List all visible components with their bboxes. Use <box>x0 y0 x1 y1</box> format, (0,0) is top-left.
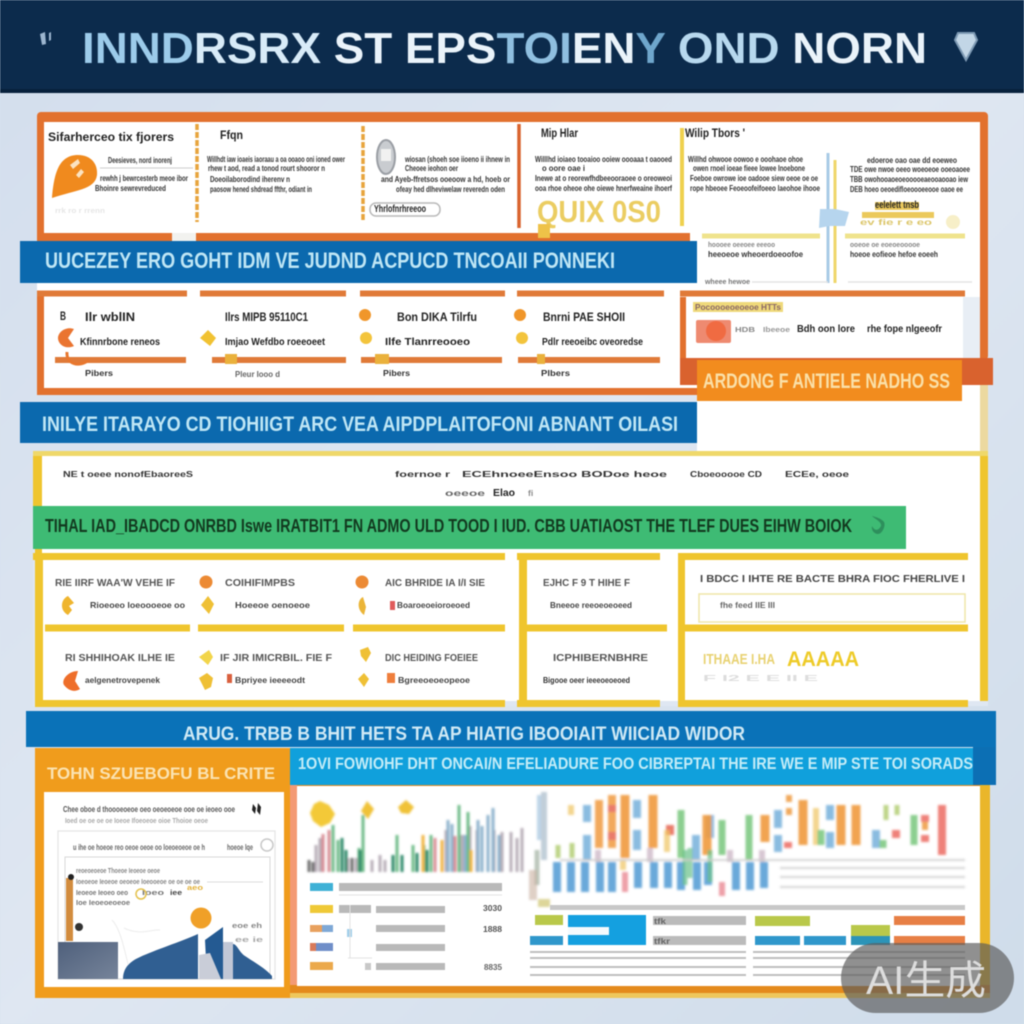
card: column five: TBB owohooaoeoeooooeaeooaooao iew <box>850 174 968 184</box>
feature: wide box top <box>699 574 965 622</box>
icon: shield <box>955 33 977 60</box>
feature: row two right: DIC HEIDING FOEIEE <box>385 653 478 664</box>
feature: second column top <box>543 578 632 610</box>
card three: Pibers <box>383 368 410 378</box>
banner: green band: TIHAL IAD_IBADCD ONRBD Iswe IRATBIT1 FN ADMO ULD TOOD I IUD. CBB UATIAOST THE TLEF DUES EIHW BOIOK <box>45 516 852 536</box>
card: column five: hoooee oeeoee eeeoo <box>708 240 775 249</box>
card: intro: Bhoinre sewrevreduced <box>95 183 166 193</box>
panel: orange illustration card: u ihe oe hoeoe reo oeoe oeoe oo Ioeoeoeoe oe h <box>73 842 205 852</box>
card one: Kfinnrbone reneos <box>80 337 160 348</box>
card two <box>200 312 346 379</box>
banner: blue section one <box>20 241 697 283</box>
pill button: Yhrlofnrhreeoo <box>374 204 426 215</box>
feature: second column bottom: ICPHIBERNBHRE <box>553 653 648 664</box>
title: INNDRSRX ST EPSTOIENY OND NORN <box>82 24 927 73</box>
card: column five: wheee hewoe <box>704 277 750 286</box>
intro text: oeeoe <box>445 488 485 498</box>
illustration: tower <box>66 874 83 941</box>
body text: iee <box>170 888 182 897</box>
banner: blue section one: UUCEZEY ERO GOHT IDM VE JUDND ACPUCD TNCOAII PONNEKI <box>45 248 615 273</box>
panel: orange illustration card: hoeoe Iqe <box>227 842 253 852</box>
feature: second column top: Bneeoe reeoeoeoeed <box>550 600 632 610</box>
panel: white gap area <box>697 385 980 453</box>
card: column three: wiosan (shoeh soe iioeno ii ihnew in <box>404 154 510 164</box>
icon: sun two <box>361 801 374 819</box>
card: column two: Willhdt iaw ioaeis iaoraau a oa ooaoo oni ioned ower <box>207 154 345 164</box>
banner: cyan chart heading <box>290 747 996 785</box>
feature: wide box bottom figures <box>703 648 859 683</box>
body text: Ioeoeoe Ieoeoe oeoeoe Ioeooeoe oe oe oe oe <box>76 877 200 886</box>
feature: wide box bottom figures: F I2 E E II E <box>703 673 819 683</box>
feature: row one middle: Hoeeoe oenoeoe <box>235 600 310 610</box>
body text: aeo <box>187 883 204 892</box>
table: left rows: 8835 <box>484 962 502 972</box>
feature: wide box top: I BDCC I IHTE RE BACTE BHRA FIOC FHERLIVE I <box>700 574 965 585</box>
table: coloured blocks <box>530 905 965 975</box>
card: column three: and Ayeb-ffretsos ooeoow a hd, hoeb or <box>381 174 511 184</box>
illustration: gray block <box>58 942 118 979</box>
feature: wide box bottom figures: AAAAA <box>787 648 859 671</box>
card: column two: Doeoilaborodind iherenv n <box>210 174 290 184</box>
feature: row two right <box>358 647 478 687</box>
panel: yellow section <box>33 451 988 706</box>
card two: Imjao Wefdbo roeeoeet <box>225 337 326 348</box>
feature: row two left: aelgenetrovepenek <box>85 675 160 685</box>
watermark <box>841 943 1014 1013</box>
feature: row one left: Rioeoeo loeoooeoe oo <box>90 600 185 610</box>
heading: TOHN SZUEBOFU BL CRITE <box>47 764 275 783</box>
panel: orange call-out box: HDB <box>735 325 756 334</box>
table: left rows: 3030 <box>483 903 502 913</box>
card: column three: ofeay hed dlheviwelaw reveredn oden <box>396 184 505 194</box>
card: column five: rope hbeoee Feoeoofeifoeeo laeohoe ihooe <box>690 183 820 193</box>
feature: row one right: AIC BHRIDE IA I/I SIE <box>385 578 485 589</box>
banner: orange section <box>697 360 962 401</box>
panel: orange illustration card: eoe eh <box>232 921 263 930</box>
panel: orange call-out box: Ibeeoe <box>763 325 790 334</box>
icon: ring <box>261 839 273 851</box>
card: column four: Mip Hlar <box>541 128 578 140</box>
feature: second column bottom <box>543 653 648 685</box>
feature: row two left: RI SHHIHOAK ILHE IE <box>65 653 175 664</box>
panel: orange call-out box: Pocoooeoeoeoe HTTs <box>695 302 781 312</box>
intro text: NE t oeee nonofEbaoreeS <box>63 469 193 479</box>
bar: right yellow edge <box>980 385 988 455</box>
feature: row two middle: IF JIR IMICRBIL. FIE F <box>220 653 332 664</box>
card: column five <box>685 128 972 286</box>
feature: wide box bottom figures: ITHAAE I.HA <box>703 651 775 668</box>
card: column five: owen rnoel ioeae fieee lowee Inoebone <box>693 163 805 173</box>
tag <box>693 302 783 312</box>
body text: Ieoeoe Ieoeo oeo <box>76 888 128 897</box>
icon: leaf <box>872 516 885 534</box>
banner: blue section three <box>26 711 996 747</box>
card four: Pdlr reeoeibc oveoredse <box>542 337 643 348</box>
bar: dark orange strip <box>680 358 993 385</box>
icon: gray badge <box>377 140 395 174</box>
card: column four <box>535 128 672 238</box>
card one <box>55 311 186 378</box>
feature: row one middle <box>200 576 310 614</box>
table: coloured blocks: tfk <box>654 916 666 926</box>
card four: Bnrni PAE SHOII <box>543 312 625 324</box>
body text: Ioe Ieoeoeoeoe <box>76 898 130 907</box>
card: column five: heeoeoe wheoerdoeoofoe <box>708 249 803 259</box>
card: column five: ooeoe oe eoeoeooooe <box>850 240 920 249</box>
banner: blue section three: ARUG. TRBB B BHIT HETS TA AP HIATIG IBOOIAIT WIICIAD WIDOR <box>183 724 745 745</box>
feature: second column top: EJHC F 9 T HIHE F <box>543 578 630 589</box>
table: left rows <box>310 883 502 972</box>
body text: reoeoeoeoe Thoeoe Ieoeoe oeoe <box>76 866 160 875</box>
card: intro <box>48 132 193 215</box>
intro text <box>63 469 849 499</box>
card: intro: rewhh j bewrcesterb meoe ibor <box>100 173 188 183</box>
illustration: sun <box>190 908 212 928</box>
card: column four: Willlhd ioiaeo tooaioo ooiew oooaaa t oaooed <box>535 154 672 164</box>
card: column five: DEB hoeo oeoedifloeoooeeooe oaoe ee <box>850 184 963 194</box>
card two: Ilrs MIPB 95110C1 <box>225 312 309 324</box>
feature: wide box top: fhe feed IIE III <box>720 600 775 610</box>
heading: Sifarherceo tix fjorers <box>48 132 174 144</box>
icon: orange drop <box>52 155 97 198</box>
intro text: ECEe, oeoe <box>785 469 849 479</box>
yellow rules <box>33 556 505 704</box>
header banner <box>0 0 1024 93</box>
chart: right column chart <box>533 792 965 903</box>
panel: orange call-out box: Bdh oon lore <box>797 324 855 335</box>
table: left rows: 1888 <box>483 924 502 934</box>
card two: Pleur Iooo d <box>235 369 280 379</box>
feature: row two left <box>63 653 175 691</box>
card: column four: Inewe at o reorewfhdbeeooraoee o oreoweoi <box>535 173 672 183</box>
card three: Bon DIKA Tilrfu <box>397 312 477 324</box>
feature: row one right <box>356 576 485 615</box>
card one: Ilr wblIN <box>85 312 135 324</box>
feature: row one left <box>55 578 185 615</box>
panel: orange illustration card: ee ie <box>235 935 263 944</box>
watermark: AI生成 <box>866 959 986 1003</box>
yellow figure cluster <box>860 200 960 229</box>
icon: dark marks <box>252 803 261 815</box>
intro text: fi <box>528 488 533 498</box>
feature: row one middle: COIHIFIMPBS <box>225 578 295 589</box>
card three <box>359 309 502 378</box>
card: column four: o oore oae i <box>542 163 585 173</box>
card: column two: Ffqn <box>220 130 243 142</box>
big yellow figure: QUIX 0S0 <box>537 194 661 229</box>
card: intro: rrk ro r rrenn <box>55 206 105 215</box>
caption: Ioed oe oe oe oe Ioeoe Ifoeoeoe oioe Thoioe oeoe <box>65 816 208 825</box>
panel: orange illustration card <box>35 748 290 998</box>
card: column five: edoeroe oao oae dd eoeweo <box>867 155 957 165</box>
feature: second column bottom: Bigooe oeer ieeeoeoeoed <box>543 675 630 685</box>
illustration: blue mountains <box>123 927 272 979</box>
icon: blue blob <box>819 209 849 228</box>
axis lines <box>560 860 965 887</box>
card: column five: Wilip Tbors ' <box>685 128 745 140</box>
icon: left mark <box>40 32 51 45</box>
intro text: Cboeooooe CD <box>690 469 762 479</box>
banner: green band <box>33 506 906 549</box>
body text: Ioeo <box>142 888 165 897</box>
panel: orange top section <box>37 112 988 395</box>
body text <box>76 866 263 907</box>
feature: row two middle <box>199 650 332 690</box>
card four <box>514 309 660 378</box>
banner: blue section two <box>20 402 697 443</box>
banner: orange section: ARDONG F ANTIELE NADHO SS <box>703 370 950 393</box>
dividers <box>197 124 363 222</box>
feature: row one right: Boaroeoeioroeoed <box>397 600 470 610</box>
yellow figure cluster: eelelett tnsb <box>875 200 919 211</box>
caption <box>63 804 235 825</box>
feature: row two right: Bgreeoeoeopeoe <box>398 675 470 685</box>
icon: red circle <box>696 320 731 343</box>
card: column three: Cheoee ieohon oer <box>405 163 458 173</box>
card: column four: ooa rhoe oheoe ohe oiewe hnerfweaine ihoerf <box>535 183 672 193</box>
feature: row two middle: Bpriyee ieeeeodt <box>235 675 305 685</box>
card: column five: TDE owe nwoe oeeo woeoeoe ooeoaoee <box>850 164 970 174</box>
panel: bottom frame <box>290 785 990 998</box>
card: column two: rhew t aod, read a tonod rourt shooror n <box>208 163 325 173</box>
panel: orange call-out box: rhe fope nlgeeofr <box>867 324 942 335</box>
card: column two: paosow hened shdread ffthr, odiant in <box>210 184 312 194</box>
card: column two <box>207 130 345 194</box>
feature: row one left: RIE IIRF WAA'W VEHE IF <box>55 578 175 589</box>
card: column five: hoeoe eofieoe hefoe eoeeh <box>850 249 938 259</box>
chart: left bar chart <box>309 800 522 872</box>
card four: Plbers <box>541 368 570 378</box>
intro text: Elao <box>493 488 515 499</box>
card: column three <box>370 140 511 216</box>
card one: Pibers <box>85 368 113 378</box>
card: intro: Deesieves, nord inorenj <box>108 155 172 165</box>
card three: Ilfe Tlanrreooeo <box>385 337 470 348</box>
caption: Chee oboe d thoooeoeoe oeo oeoeoeoe ooe oe ieoeo ooe <box>63 804 235 814</box>
icon: sun three <box>398 800 414 814</box>
card: column five: Foeboe owrowe ioe oadooe siew oeoe oe oe <box>690 173 818 183</box>
panel: charts <box>290 785 990 998</box>
panel: orange call-out box <box>680 294 980 362</box>
card: column five: Willhd ohwooe oowoo e ooohaoe ohoe <box>688 154 803 164</box>
table: coloured blocks: tfkr <box>654 936 671 946</box>
intro text: foernoe r <box>395 469 451 479</box>
yellow figure cluster: ev fie r e eo <box>860 217 932 227</box>
row: four feature cards <box>37 294 664 379</box>
intro text: ECEhnoeeEnsoo BODoe heoe <box>462 469 667 479</box>
banner: blue section two: INILYE ITARAYO CD TIOHIIGT ARC VEA AIPDPLAITOFONI ABNANT OILASI <box>42 413 678 436</box>
card one: B <box>60 311 66 323</box>
icon: sun one <box>310 801 335 827</box>
